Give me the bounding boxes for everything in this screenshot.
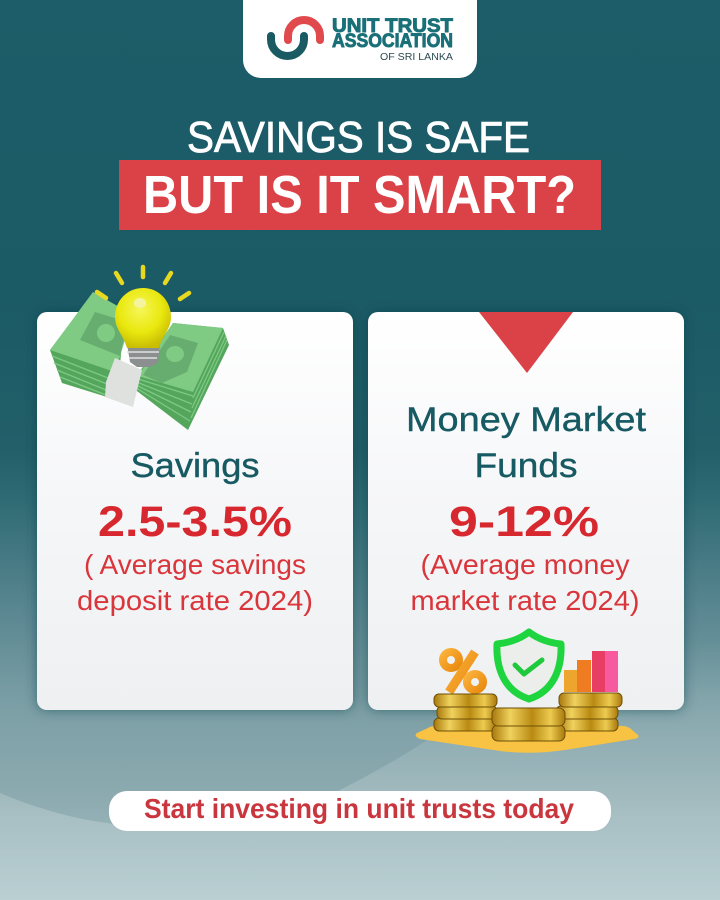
logo text: ASSOCIATION [332, 31, 453, 52]
savings rate: 2.5-3.5% [98, 498, 292, 546]
bar chart [564, 651, 618, 692]
title banner: BUT IS IT SMART? [143, 165, 576, 225]
platform [416, 726, 638, 753]
icon: money and light bulb [50, 267, 229, 430]
logo text [332, 16, 453, 52]
heading: savings: Savings [130, 447, 260, 485]
icon: coins shield and chart [416, 632, 638, 753]
left coins [434, 694, 497, 731]
bulb base [127, 344, 160, 367]
logo text: UNIT TRUST [332, 16, 453, 37]
logo mark [271, 20, 320, 56]
percent sign [443, 652, 483, 692]
call to action: Start investing in unit trusts today [144, 793, 574, 824]
money market note: (Average money [420, 549, 630, 580]
bulb rays [97, 267, 189, 299]
bulb glass [115, 288, 171, 348]
logo panel [243, 0, 477, 78]
money market rate: 9-12% [449, 498, 599, 546]
heading: money market funds [406, 401, 647, 485]
logo subtext: OF SRI LANKA [380, 52, 453, 63]
money market note: market rate 2024) [410, 585, 640, 616]
savings note [77, 549, 313, 616]
paper band [105, 358, 142, 407]
heading: money market funds: Funds [474, 447, 578, 485]
heading: money market funds: Money Market [406, 401, 647, 439]
money market note [410, 549, 640, 616]
center coins [492, 708, 565, 741]
panel: savings [37, 312, 353, 710]
panel: money market funds [368, 312, 684, 710]
title line 1: SAVINGS IS SAFE [187, 113, 530, 162]
check mark [515, 660, 542, 674]
savings note: ( Average savings [84, 549, 306, 580]
money stack [50, 292, 229, 430]
shield [497, 632, 561, 699]
savings note: deposit rate 2024) [77, 585, 313, 616]
red pointer [479, 312, 573, 373]
right coins [556, 693, 622, 731]
